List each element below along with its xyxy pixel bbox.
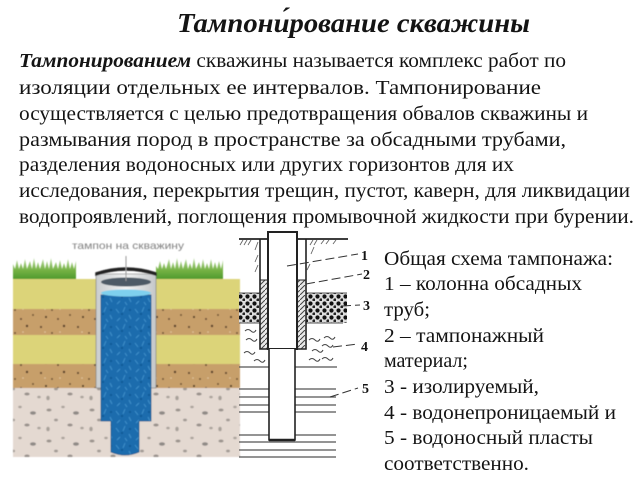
- soil layers: [13, 279, 240, 457]
- text block: definition: размывания пород в пространстве за обсадными трубами,: [19, 129, 566, 151]
- water surface: [101, 290, 151, 296]
- text block: general scheme legend: 1 – колонна обсадных: [384, 273, 582, 295]
- well caption: тампон на скважину: [72, 240, 185, 252]
- text block: general scheme legend: 3 - изолируемый,: [384, 376, 539, 398]
- title: Тампони́рование скважины: [177, 8, 530, 38]
- aquifuge layer dots: [239, 293, 260, 323]
- callout numbers: 5: [362, 382, 369, 397]
- text block: general scheme legend: [384, 248, 616, 475]
- text block: general scheme legend: труб;: [384, 299, 430, 321]
- text block: definition: разделения водоносных или других горизонтов для их: [19, 154, 514, 176]
- waterproof layer marks: [244, 330, 335, 362]
- text block: definition: [19, 50, 634, 228]
- text block: definition: Тампонированием скважины называется комплекс работ по: [19, 50, 566, 72]
- casing pipe: [96, 274, 156, 388]
- water-bearing layer lines: [239, 367, 337, 457]
- text block: general scheme legend: Общая схема тампонажа:: [384, 248, 613, 270]
- callout numbers: 3: [363, 299, 370, 314]
- ground hatch: [240, 240, 336, 272]
- layer boundaries: [239, 293, 347, 323]
- tampon disk: [101, 278, 151, 286]
- lower casing: [269, 349, 295, 440]
- callout numbers: 2: [363, 268, 370, 283]
- text block: definition: исследования, перекрытия трещин, пустот, каверн, для ликвидации: [19, 180, 630, 202]
- callout numbers: 1: [361, 249, 368, 264]
- caption pointer: [125, 256, 127, 281]
- tamponage material: [260, 280, 268, 349]
- text block: definition: водопроявлений, поглощения промывочной жидкости при бурении.: [19, 206, 634, 228]
- leader lines: [287, 254, 362, 397]
- water column: [101, 295, 151, 455]
- text block: definition: изоляции отдельных ее интервалов. Тампонирование: [19, 77, 541, 99]
- callout numbers: [361, 249, 370, 397]
- text block: general scheme legend: соответственно.: [384, 453, 529, 475]
- diagram: well cross-section: [239, 232, 370, 457]
- text block: general scheme legend: материал;: [384, 350, 468, 372]
- grass: [13, 258, 223, 279]
- casing column: [268, 232, 297, 349]
- text block: general scheme legend: 4 - водонепроницаемый и: [384, 402, 616, 424]
- ground line: [239, 238, 348, 240]
- illustration: well in soil layers: [13, 240, 240, 457]
- callout numbers: 4: [361, 340, 368, 355]
- cap: [96, 268, 156, 275]
- annulus outline: [260, 239, 306, 349]
- text block: general scheme legend: 2 – тампонажный: [384, 325, 544, 347]
- text block: definition: осуществляется с целью предотвращения обвалов скважины и: [19, 103, 588, 125]
- text block: general scheme legend: 5 - водоносный пласты: [384, 427, 593, 449]
